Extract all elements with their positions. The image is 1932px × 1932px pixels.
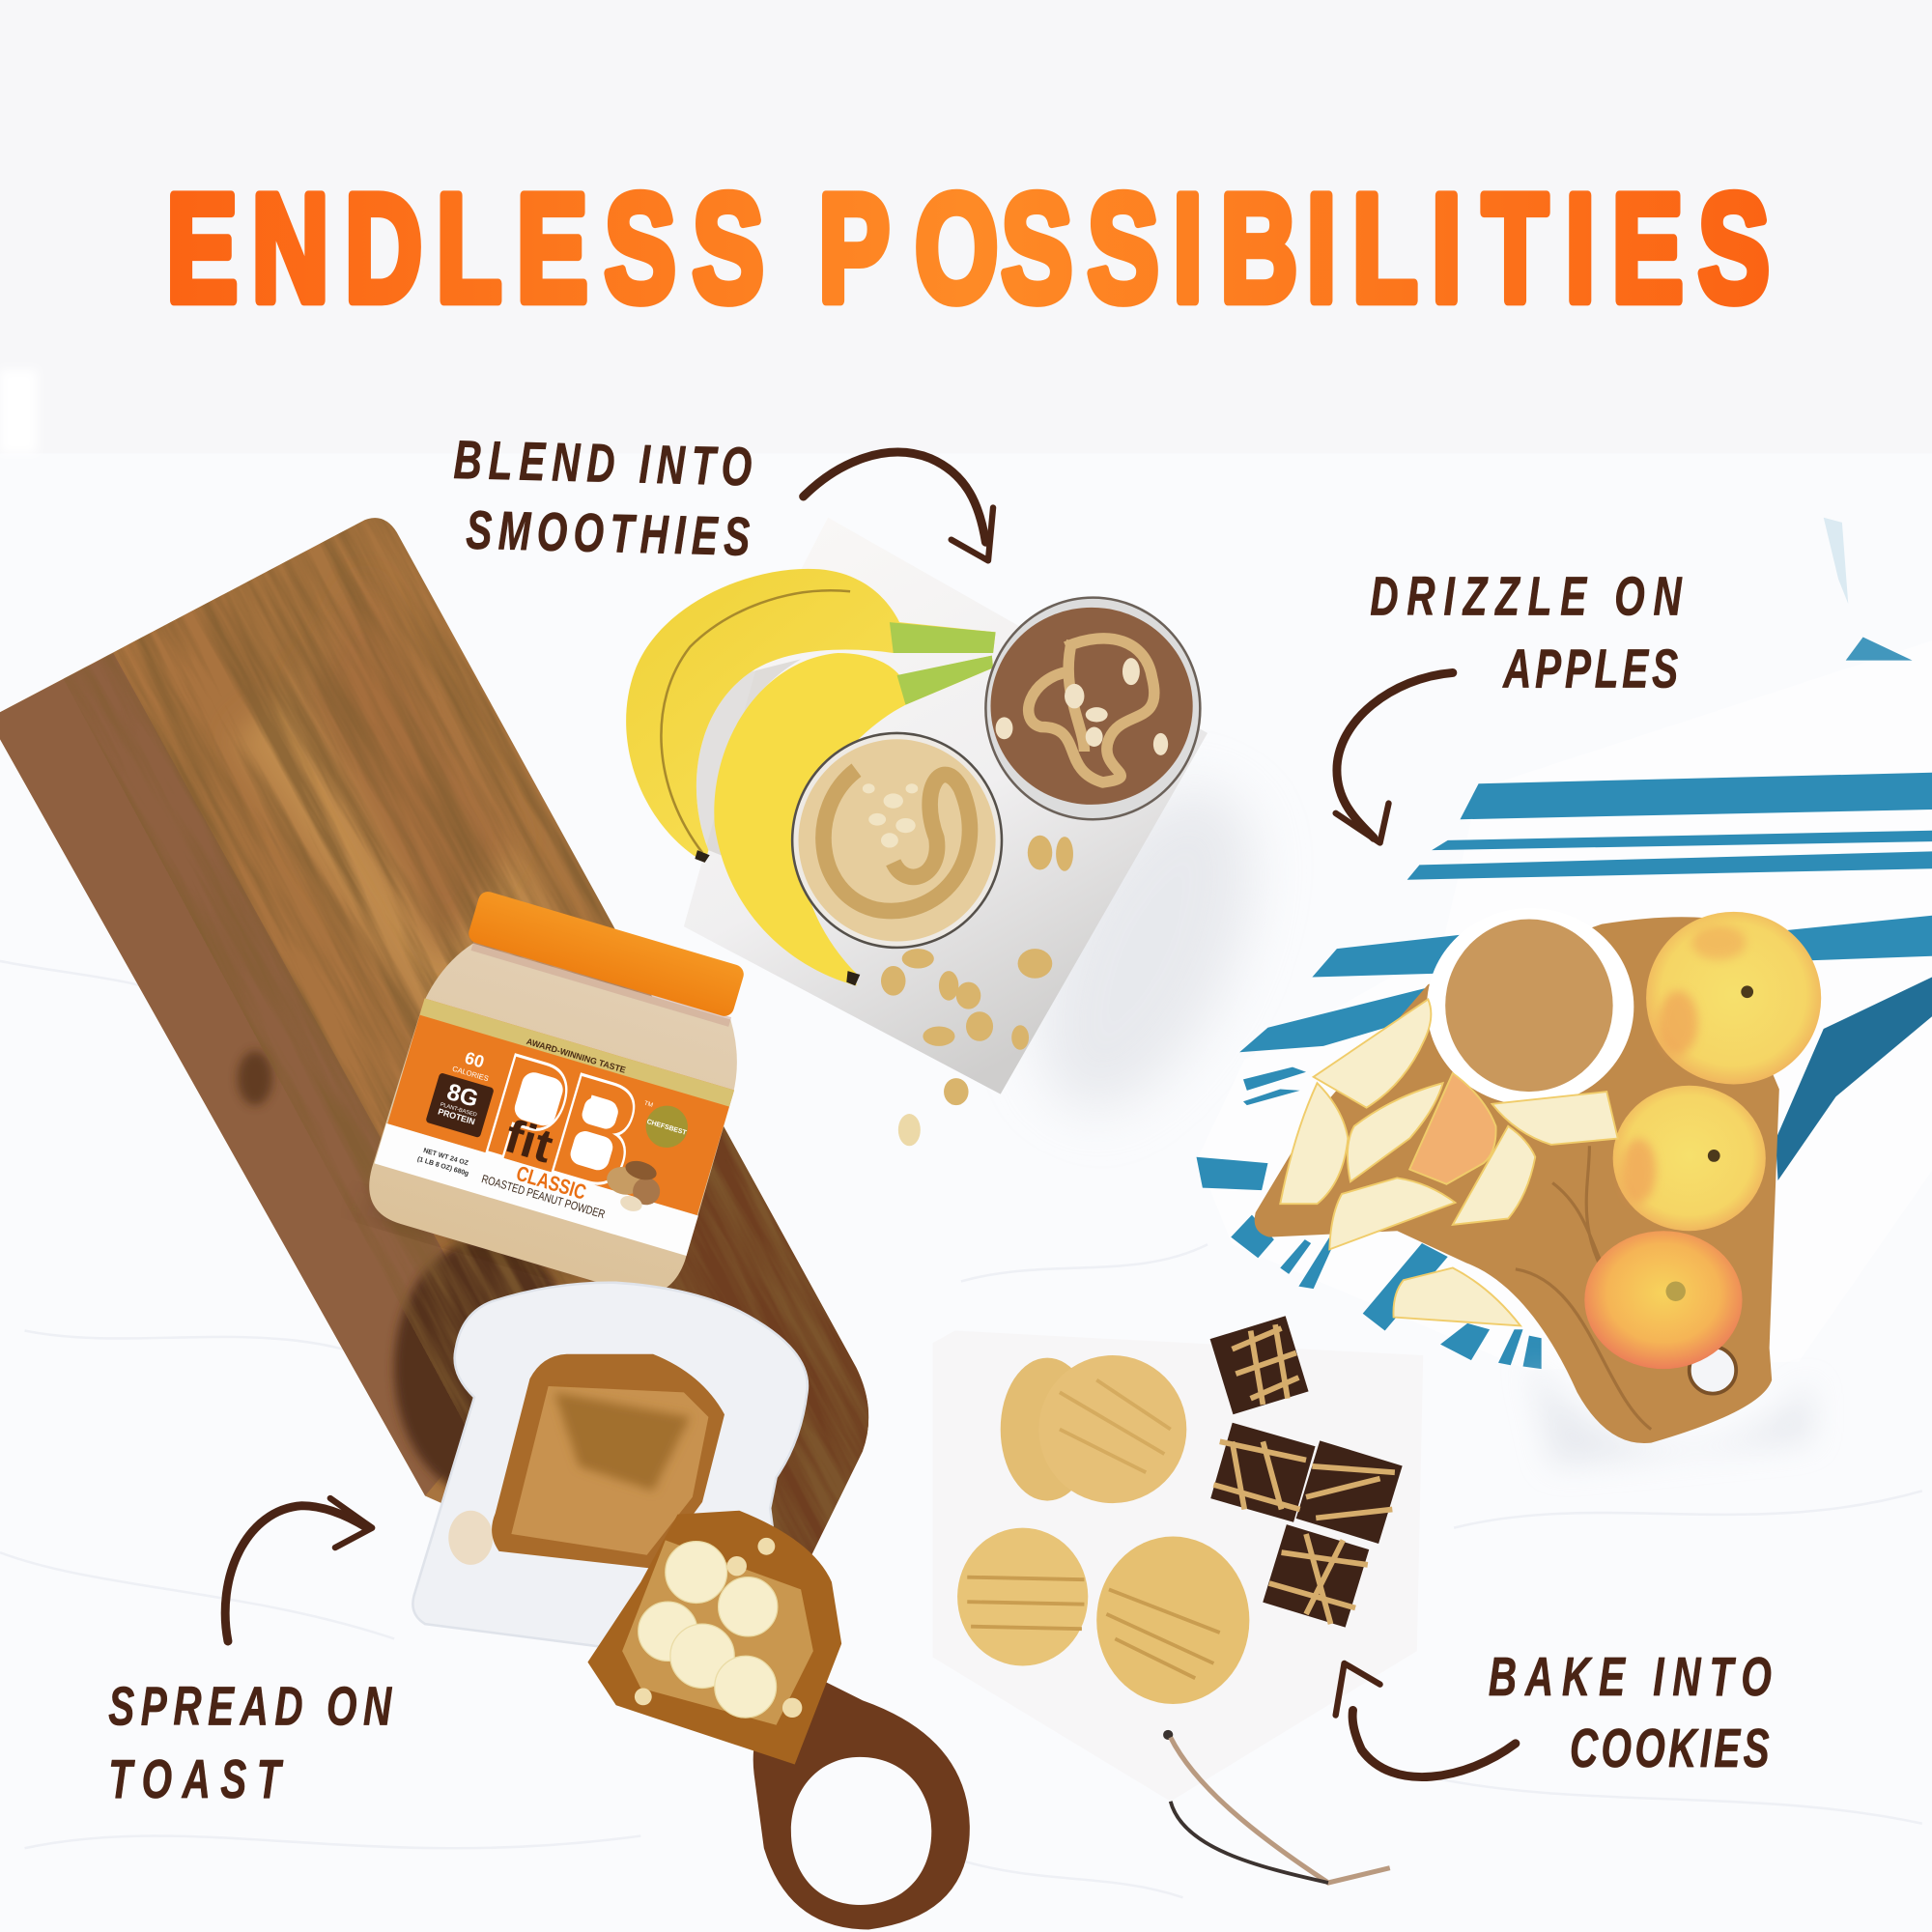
label: (1 LB 8 OZ) 680g: [416, 1156, 469, 1178]
board handle: [753, 1669, 970, 1929]
label: bake into cookies: BAKE INTO: [1489, 1648, 1772, 1708]
apple slices: [1280, 999, 1618, 1325]
marble tile: [684, 518, 1208, 1094]
upper stripes: [1197, 518, 1932, 1369]
label: drizzle on apples: DRIZZLE ON: [1370, 567, 1683, 627]
cookies: [957, 1355, 1249, 1704]
label: bake into cookies: [1489, 1648, 1772, 1779]
banana tips: [695, 850, 860, 985]
banana back: [626, 569, 996, 863]
olive wood board: [1255, 917, 1779, 1443]
label: spread on toast: TOAST: [108, 1750, 284, 1810]
label: drizzle on apples: [1370, 567, 1683, 699]
peanut smoothie: [792, 733, 1002, 948]
panel: striped towel: [1197, 518, 1932, 1370]
PB logo: fit: [498, 1110, 558, 1174]
syrup on plate: [448, 1511, 493, 1565]
board shadow: [1528, 1355, 1811, 1466]
bread-shaped plate: [412, 1283, 808, 1651]
shadow: [995, 756, 1297, 1142]
panel: cookies on marble: [933, 1316, 1423, 1883]
lid: [467, 890, 746, 1018]
label: spread on toast: [108, 1677, 393, 1810]
label: CLASSIC: [514, 1161, 589, 1205]
panel: apples board: [1255, 908, 1821, 1466]
bowl of peanut sauce: [1427, 908, 1634, 1105]
arrow: toast: [225, 1498, 372, 1641]
banana stems: [890, 622, 996, 705]
label: [375, 998, 735, 1256]
label: bake into cookies: COOKIES: [1570, 1719, 1770, 1779]
label: TM: [643, 1100, 654, 1109]
banana front: [714, 653, 993, 985]
label: blend into smoothies: SMOOTHIES: [466, 500, 751, 567]
chocolate smoothie: [985, 598, 1200, 819]
wooden cutting board: [0, 334, 1080, 1929]
banana shadow: [696, 659, 801, 863]
arrow: blend: [804, 452, 993, 560]
banana toast: [587, 1511, 841, 1765]
protein badge: 8G: [444, 1079, 481, 1113]
chefsbest medal: [640, 1100, 693, 1152]
panel: smoothies on marble: [626, 518, 1297, 1146]
title: ENDLESS POSSIBILITIES: [166, 162, 1770, 333]
brownies with peanut drizzle: [1210, 1316, 1403, 1628]
label: spread on toast: SPREAD ON: [108, 1677, 393, 1737]
banana ridge line: [661, 590, 850, 853]
award line: AWARD-WINNING TASTE: [526, 1037, 627, 1075]
scattered peanuts: [881, 836, 1073, 1146]
protein badge: [425, 1072, 495, 1138]
label: blend into smoothies: BLEND INTO: [453, 431, 753, 497]
arrow: drizzle: [1336, 672, 1453, 842]
protein badge: PROTEIN: [437, 1107, 476, 1126]
arrow: cookies: [1336, 1663, 1516, 1777]
label: CALORIES: [451, 1065, 490, 1083]
PB logo: PB: [472, 1026, 655, 1219]
board hole: [1690, 1347, 1736, 1394]
plain toast: [492, 1354, 724, 1569]
jar shadow: [366, 1194, 651, 1300]
60 calories: 60: [463, 1048, 487, 1072]
label: blend into smoothies: [453, 431, 753, 567]
white marble board: [933, 1331, 1423, 1802]
jar body: [359, 934, 754, 1304]
label: drizzle on apples: APPLES: [1502, 639, 1678, 699]
panel: jar of PB fit: [357, 882, 770, 1308]
label: NET WT 24 OZ: [422, 1148, 469, 1167]
peanuts: [600, 1153, 668, 1217]
panel: toast plate: [412, 1283, 841, 1765]
label: ROASTED PEANUT POWDER: [480, 1172, 607, 1221]
apples: [1584, 912, 1821, 1369]
leather strap: [1163, 1730, 1390, 1883]
chefsbest medal: CHEFSBEST: [646, 1119, 688, 1137]
protein badge: PLANT-BASED: [440, 1102, 477, 1119]
